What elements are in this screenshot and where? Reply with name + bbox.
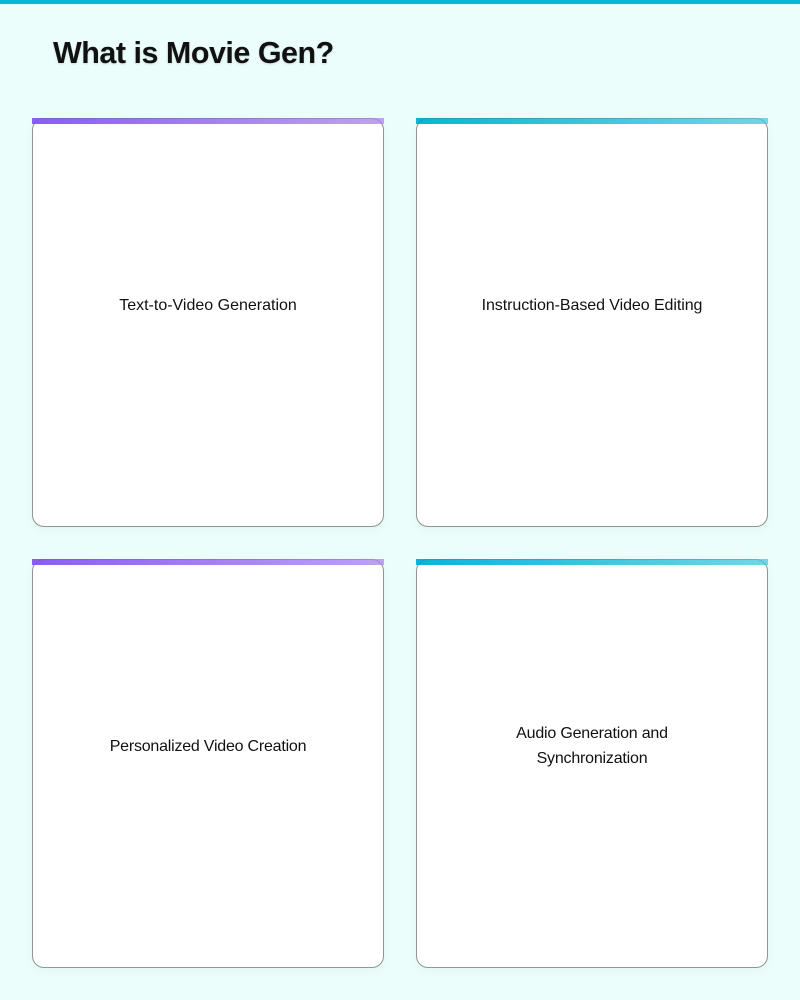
panel accent bar: purple xyxy=(32,559,384,565)
panel: Text-to-Video Generation xyxy=(32,118,384,527)
panel label: Instruction-Based Video Editing xyxy=(482,296,702,314)
panel: Instruction-Based Video Editing xyxy=(416,118,768,527)
panel label: Personalized Video Creation xyxy=(110,738,306,754)
title: What is Movie Gen? xyxy=(53,36,334,70)
panel: Audio Generation and Synchronization xyxy=(416,559,768,968)
panel accent bar: purple xyxy=(32,118,384,124)
top accent bar xyxy=(0,0,800,4)
panel accent bar: teal xyxy=(416,118,768,124)
panel label: Text-to-Video Generation xyxy=(119,296,297,314)
panel accent bar: teal xyxy=(416,559,768,565)
panel label: Synchronization xyxy=(537,750,647,767)
panel label xyxy=(516,725,668,767)
panel label: Audio Generation and xyxy=(516,725,668,742)
panel: Personalized Video Creation xyxy=(32,559,384,968)
